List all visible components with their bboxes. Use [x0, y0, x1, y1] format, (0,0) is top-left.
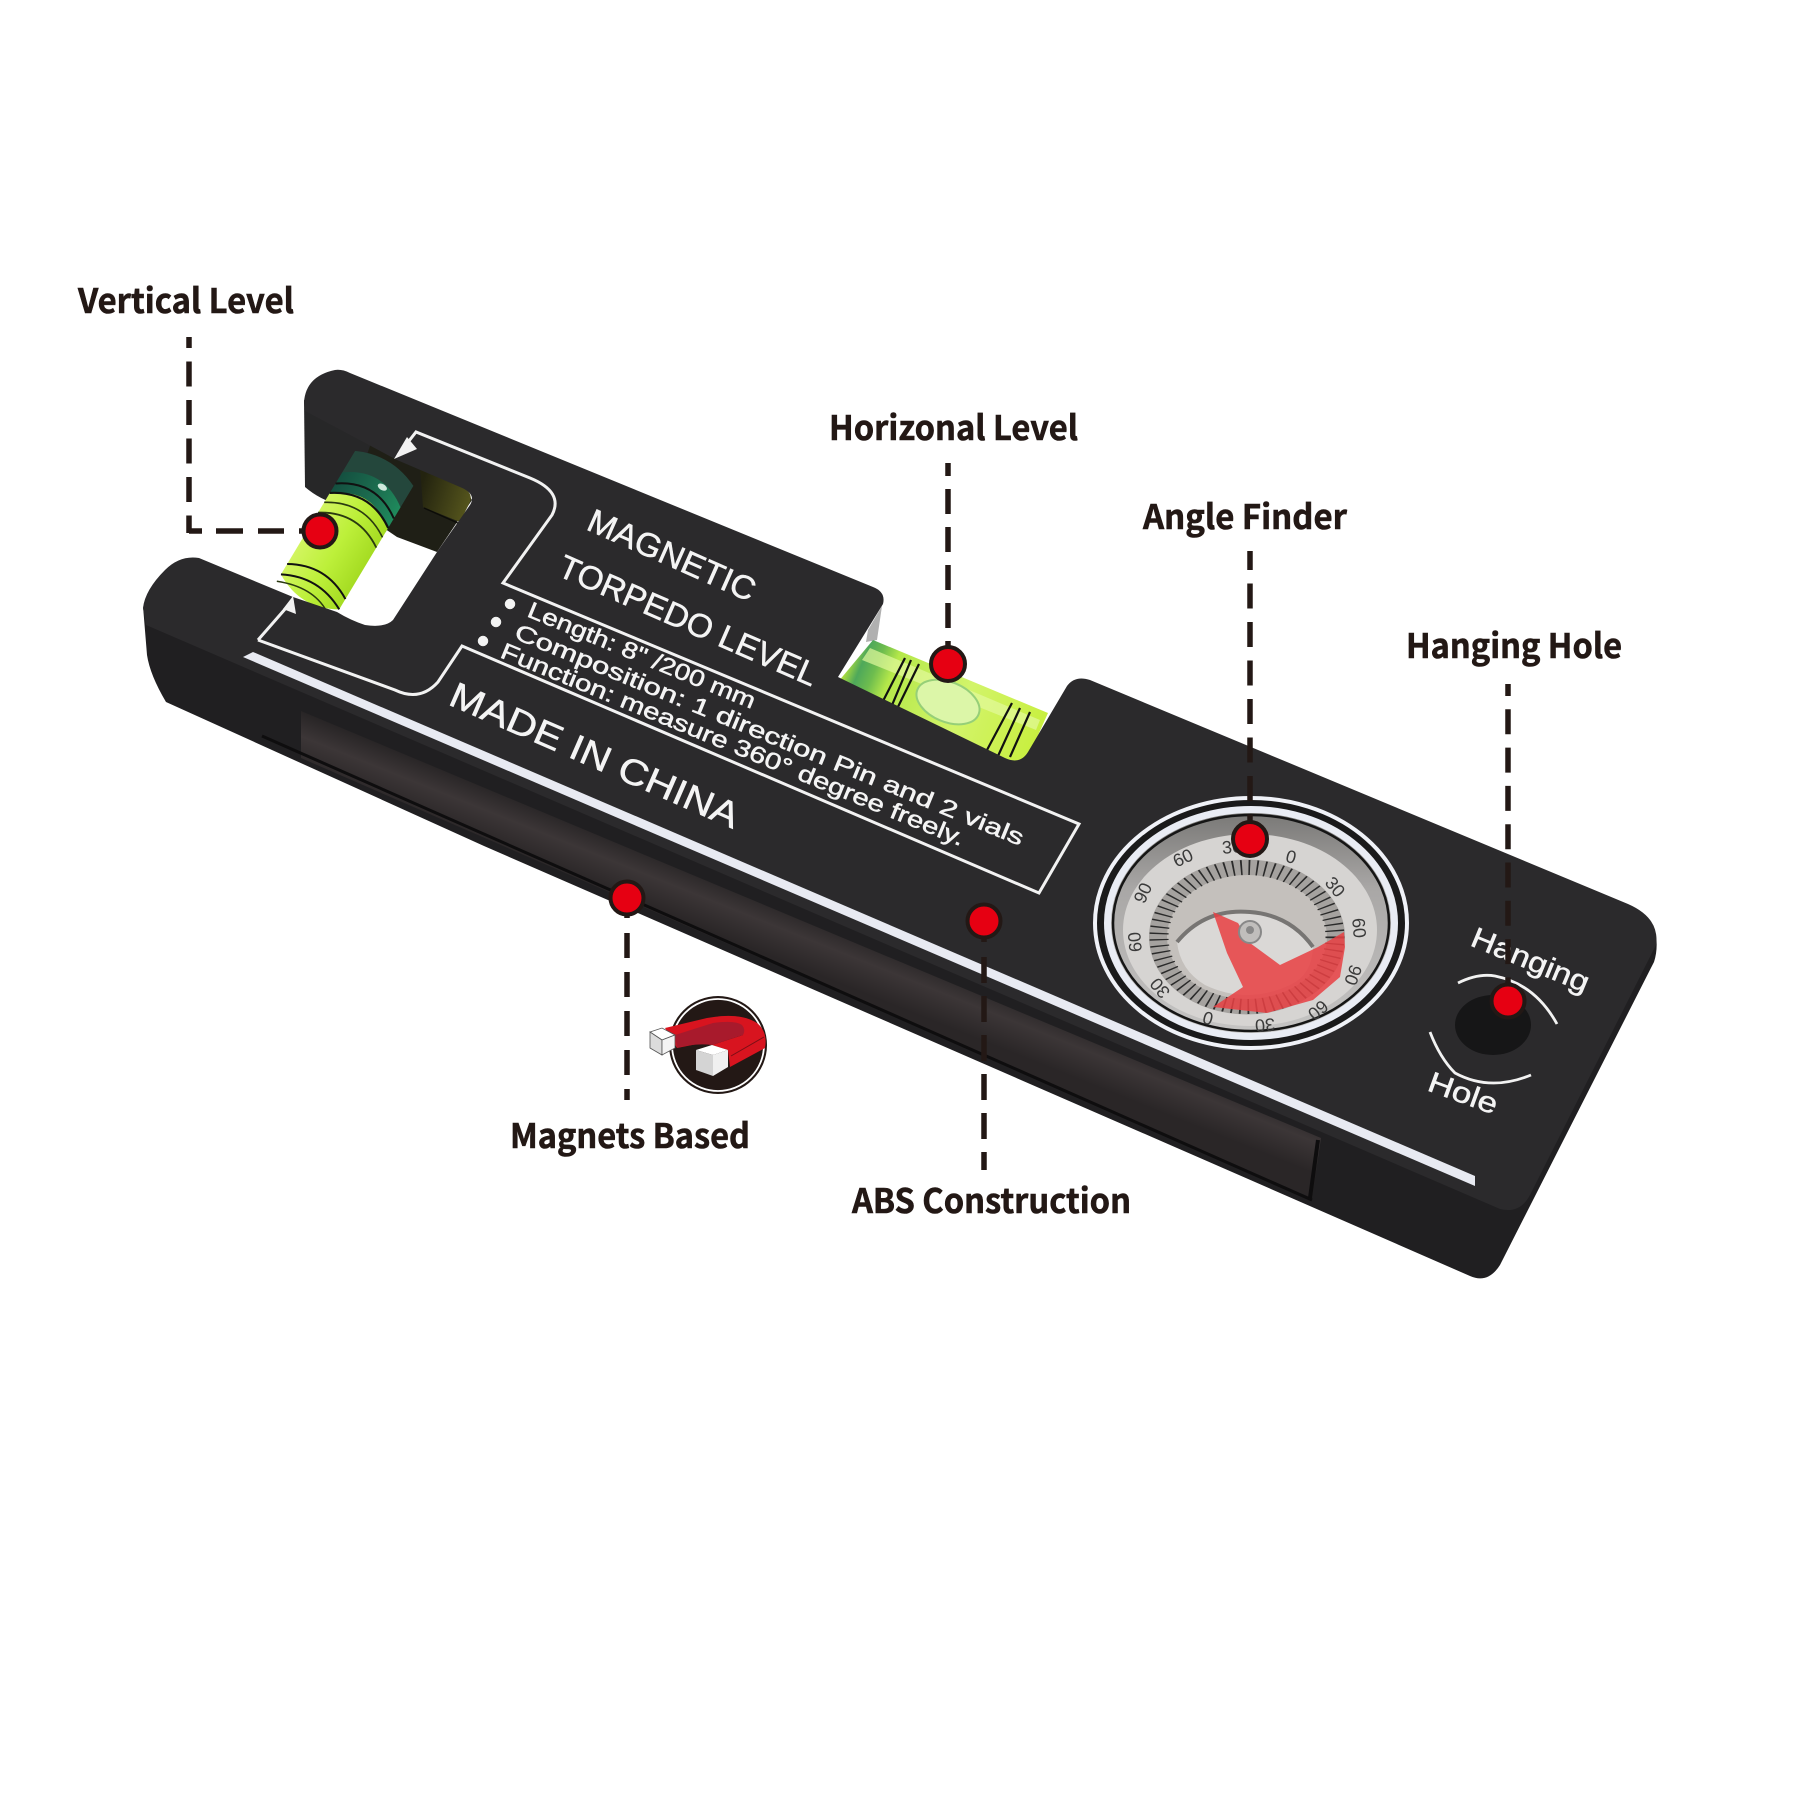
callout: ABS Construction: ABS Construction [851, 1174, 1131, 1223]
dial numbers: 60 [1170, 845, 1196, 871]
white stripe [243, 652, 1475, 1186]
hanging hole [1424, 922, 1594, 1121]
icon: horseshoe magnet [650, 996, 767, 1094]
printed outline with arrows [258, 432, 1079, 893]
callout: Angle Finder [1142, 490, 1347, 856]
callout: Angle Finder: Angle Finder [1142, 490, 1347, 539]
horizontal vial [838, 606, 1048, 762]
dial numbers: 60 [1304, 996, 1332, 1024]
callout: Vertical Level: Vertical Level [77, 274, 294, 323]
dial numbers: 0 [1284, 846, 1298, 868]
printed specifications [478, 597, 1028, 851]
dial numbers: 60 [1124, 931, 1146, 953]
vertical vial pocket [304, 400, 472, 552]
dial numbers: 30 [1321, 873, 1349, 901]
printed title: TORPEDO LEVEL [553, 548, 824, 693]
callout: Horizonal Level: Horizonal Level [829, 401, 1078, 450]
body side wall [143, 606, 1657, 1278]
red sector and needle [1213, 912, 1345, 1013]
body top face [143, 370, 1656, 1210]
dial numbers: 0 [1201, 1007, 1215, 1029]
graduation ticks [1159, 867, 1335, 1007]
callout: Horizonal Level [829, 401, 1078, 681]
printed specifications: Composition: 1 direction Pin and 2 vials [511, 619, 1028, 851]
dial numbers: 30 [1146, 974, 1174, 1002]
hanging hole: Hanging [1466, 922, 1594, 999]
dial numbers: 30 [1254, 1014, 1276, 1036]
callout: Magnets Based: Magnets Based [510, 1109, 750, 1158]
callout: Hanging Hole: Hanging Hole [1406, 619, 1622, 668]
hanging hole: Hole [1424, 1067, 1502, 1121]
printed specifications: Length: 8" /200 mm [524, 597, 760, 714]
magnet strip [262, 711, 1321, 1200]
dial numbers [1124, 836, 1370, 1036]
vertical vial [276, 444, 418, 618]
torpedo level product [143, 370, 1657, 1278]
dial numbers: 30 [1221, 836, 1243, 858]
printed specifications: Function: measure 360° degree freely. [497, 638, 969, 851]
dial numbers: 60 [1348, 917, 1370, 939]
callout: Hanging Hole [1406, 619, 1622, 1018]
angle finder dial [1095, 798, 1407, 1048]
callout: Vertical Level [77, 274, 337, 548]
dial numbers: 90 [1130, 880, 1156, 906]
printed origin mark: MADE IN CHINA [444, 674, 746, 836]
dial numbers: 90 [1340, 962, 1366, 988]
callout: ABS Construction [851, 904, 1131, 1223]
printed title: MAGNETIC [582, 502, 762, 608]
callout: Magnets Based [510, 882, 767, 1158]
